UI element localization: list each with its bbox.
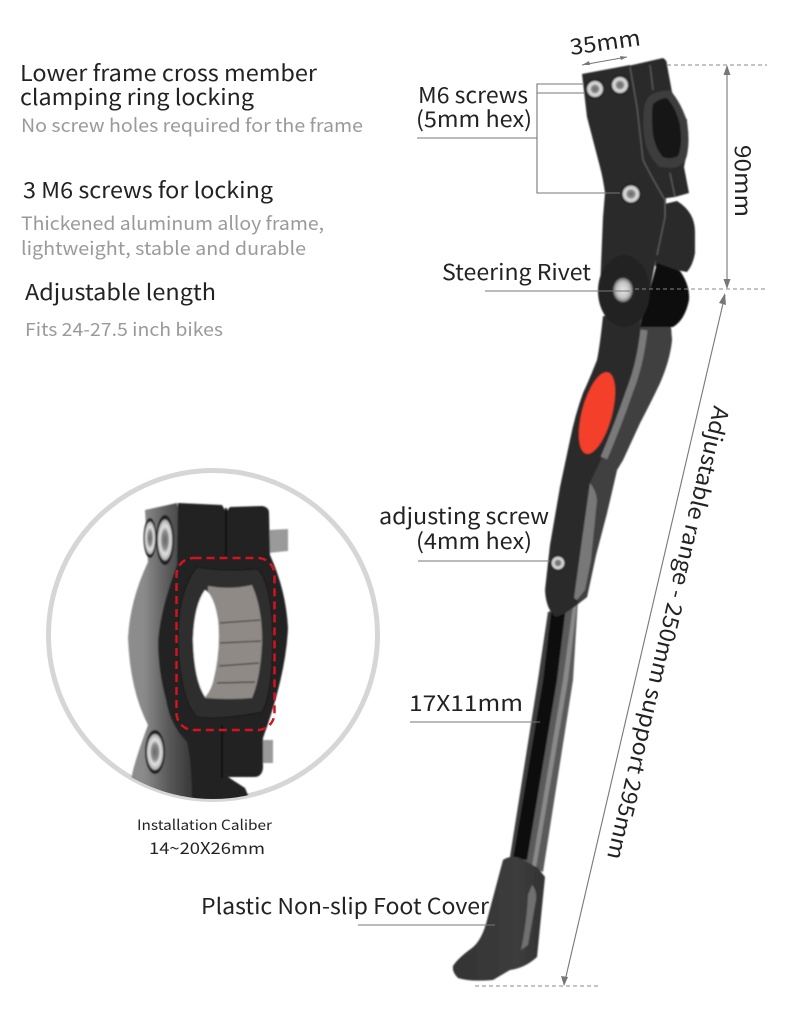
arm body xyxy=(545,316,672,617)
callout: adjusting screw xyxy=(379,499,550,561)
callout: tube size xyxy=(409,686,540,722)
plate edge xyxy=(630,65,675,255)
callout: steering rivet: Steering Rivet xyxy=(442,255,591,287)
caption: installation caliber: Installation Caliber xyxy=(137,815,273,835)
inset ring xyxy=(48,470,378,800)
leg left rim xyxy=(510,612,551,858)
callout: M6 screws: M6 screws xyxy=(418,78,528,110)
foot highlight xyxy=(521,885,536,950)
callout: adjusting screw: (4mm hex) xyxy=(416,524,532,556)
heading: M6 screws: 3 M6 screws for locking xyxy=(23,173,274,205)
callout: M6 screws xyxy=(416,78,620,193)
clamp opening xyxy=(643,90,688,168)
rivet bolt xyxy=(612,277,634,303)
heading: frame clamp: clamping ring locking xyxy=(20,80,255,112)
callout: adjusting screw: adjusting screw xyxy=(379,499,549,531)
text: aluminum frame: lightweight, stable and durable xyxy=(21,235,306,261)
arm right band xyxy=(578,316,672,604)
red dashed outline xyxy=(176,558,274,730)
heading: adjustable length: Adjustable length xyxy=(25,275,216,307)
gray liner xyxy=(205,585,262,699)
opening xyxy=(193,590,219,697)
dimension: 90mm xyxy=(635,65,767,289)
rivet cap xyxy=(598,255,650,327)
clamp close-up xyxy=(120,503,288,800)
liner lines xyxy=(217,620,261,683)
arm stripe xyxy=(604,330,644,458)
bracket screws xyxy=(585,79,605,99)
dimension: adjustable range: Adjustable range - 250mm support 295mm xyxy=(600,403,738,863)
lower rubber bulge xyxy=(655,201,695,272)
rubber ring xyxy=(178,567,273,718)
heading: frame clamp: Lower frame cross member xyxy=(20,56,317,88)
foot cover xyxy=(453,857,545,981)
caption: installation caliber xyxy=(137,815,273,859)
clamp rubber pad xyxy=(628,58,689,199)
dimension: 90mm: 90mm xyxy=(728,145,760,217)
leg tube xyxy=(510,600,578,872)
dimension: 35mm: 35mm xyxy=(568,20,642,62)
metal plate xyxy=(127,502,193,798)
callout: tube size: 17X11mm xyxy=(409,686,523,718)
callout: foot cover: Plastic Non-slip Foot Cover xyxy=(201,889,489,921)
arm lower highlight xyxy=(574,483,597,600)
text: aluminum frame xyxy=(21,210,324,261)
body split xyxy=(222,508,226,778)
heading: frame clamp xyxy=(20,56,317,112)
inset: clamp detail xyxy=(48,470,378,800)
callout: M6 screws: (5mm hex) xyxy=(416,102,532,134)
text: bike fit: Fits 24-27.5 inch bikes xyxy=(25,316,223,342)
bracket plate xyxy=(582,65,666,290)
text: aluminum frame: Thickened aluminum alloy frame, xyxy=(21,210,324,236)
kickstand photo xyxy=(453,58,695,981)
adjusting screw xyxy=(550,555,566,571)
black clamp body xyxy=(158,503,288,800)
text: no screw holes: No screw holes required for the frame xyxy=(21,112,363,138)
red reflector xyxy=(572,369,622,457)
screws on plate xyxy=(144,518,156,558)
threads xyxy=(262,529,288,763)
caption: installation caliber: 14~20X26mm xyxy=(149,835,265,859)
leg highlight xyxy=(532,604,577,868)
leg black stripe xyxy=(513,606,566,860)
lower pivot cup xyxy=(640,263,689,327)
dimension: adjustable range xyxy=(475,293,738,986)
